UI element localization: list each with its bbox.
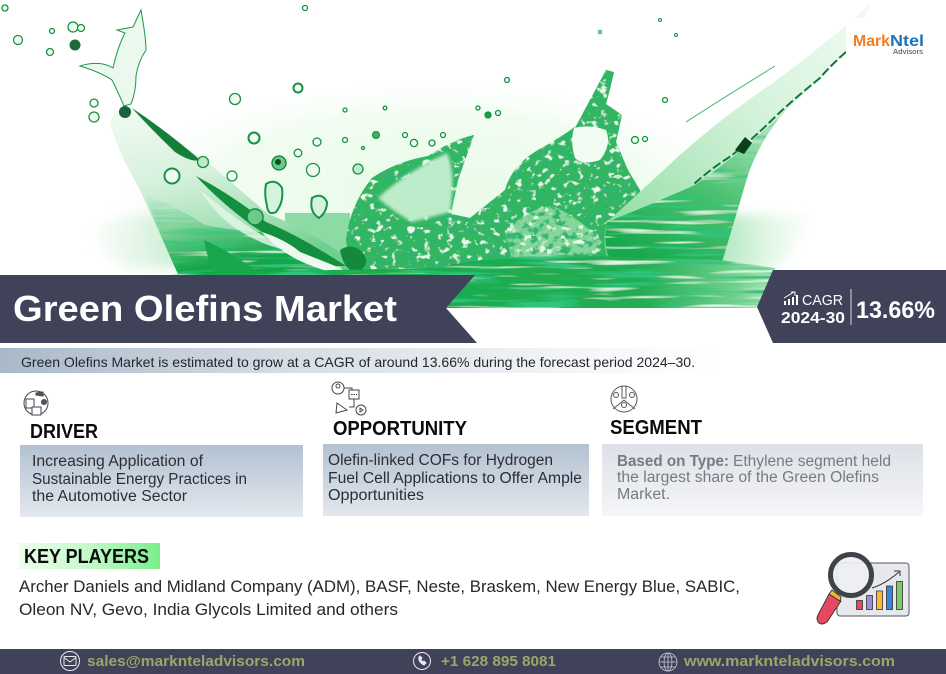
panel: opportunity: [323, 382, 589, 516]
lower splash rim: [265, 182, 327, 218]
hero image: green liquid splash: [2, 2, 872, 308]
icon: email: [60, 652, 80, 670]
logo: MarkNtel Advisors: Ntel: [890, 33, 924, 50]
footer bar: [0, 649, 946, 674]
CAGR badge: CAGR: [802, 292, 843, 309]
panel: segment: [602, 386, 923, 516]
player list: Archer Daniels and Midland Company (ADM), BASF, Neste, Braskem, New Energy Blue, SABIC,: [19, 578, 740, 596]
panel: driver: Increasing Application of: [32, 453, 204, 470]
phone: +1 628 895 8081: [441, 653, 556, 670]
summary bar: [0, 348, 720, 373]
icon: growth chart: [784, 292, 798, 305]
panel: key players: [19, 543, 740, 619]
left pool: [85, 212, 205, 268]
panel: opportunity: Olefin-linked COFs for Hydrogen: [328, 452, 553, 469]
droplets: [2, 5, 678, 184]
background water line: [285, 213, 640, 262]
icon: segment circle: [611, 386, 637, 412]
panel: opportunity: Fuel Cell Applications to Offer Ample: [328, 470, 582, 487]
panel: driver: the Automotive Sector: [32, 488, 187, 505]
icon: phone: [414, 652, 430, 670]
panel: driver: Sustainable Energy Practices in: [32, 471, 247, 488]
website: www.marknteladvisors.com: [683, 653, 895, 670]
player list: Oleon NV, Gevo, India Glycols Limited and others: [19, 601, 398, 619]
CAGR badge: [757, 270, 946, 343]
panel: opportunity: Opportunities: [328, 487, 424, 504]
left crown: [110, 107, 372, 274]
icon: globe: [659, 653, 677, 671]
title: Green Olefins Market: [13, 288, 397, 329]
heading: key players: KEY PLAYERS: [24, 546, 149, 568]
icon: opportunity network: [332, 382, 366, 415]
panel: segment: the largest share of the Green Olefins: [617, 469, 879, 486]
CAGR badge: 13.66%: [856, 297, 935, 324]
icon: magnifier over bar chart: [817, 554, 909, 624]
right crown: [604, 2, 872, 262]
heading: driver: DRIVER: [30, 421, 98, 443]
icon: driver globe: [24, 391, 48, 415]
email: sales@marknteladvisors.com: [87, 653, 305, 670]
right pool: [705, 214, 815, 270]
panel: segment: Based on Type:: [617, 453, 729, 470]
logo: MarkNtel Advisors: Advisors: [893, 47, 923, 56]
heading: segment: SEGMENT: [610, 417, 702, 439]
water surface: [170, 255, 775, 308]
title banner: [0, 275, 477, 343]
CAGR badge: 2024-30: [781, 310, 845, 327]
logo: MarkNtel Advisors: [846, 18, 928, 64]
panel: segment: Market.: [617, 486, 670, 503]
panel: driver: [20, 391, 303, 517]
center splash: [346, 70, 650, 274]
heading: opportunity: OPPORTUNITY: [333, 418, 468, 440]
panel: segment: Ethylene segment held: [733, 453, 891, 470]
summary bar: Green Olefins Market is estimated to grow at a CAGR of around 13.66% during the forecast period 2024–30.: [21, 354, 695, 370]
left crown spray column: [80, 10, 146, 106]
logo: MarkNtel Advisors: Mark: [853, 33, 890, 50]
player list: [19, 578, 740, 619]
